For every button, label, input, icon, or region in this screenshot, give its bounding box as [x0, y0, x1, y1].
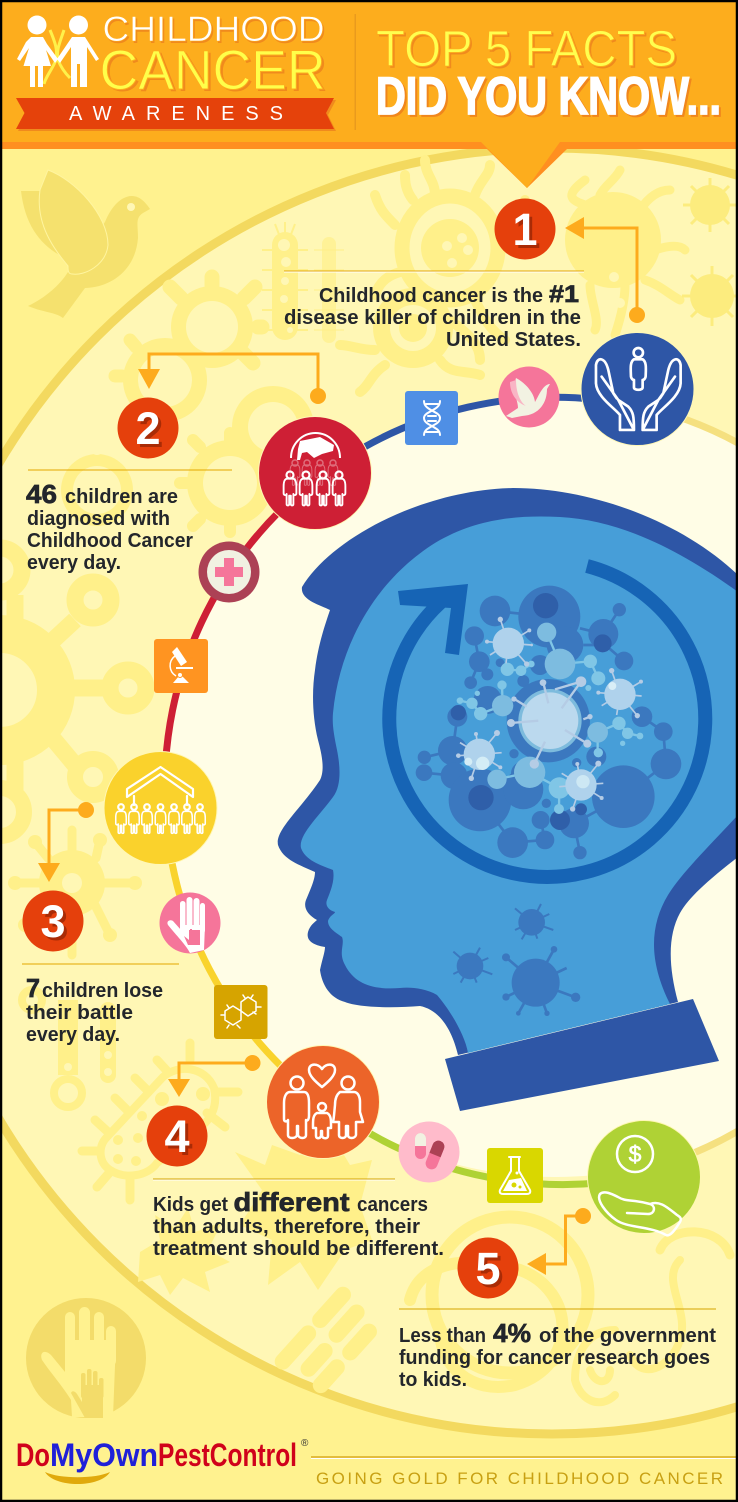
- icon: hand holding dollar: [588, 1120, 700, 1235]
- fact 1: text: disease killer of children in the: [284, 307, 581, 329]
- fact 3: number badge: 3: [40, 896, 66, 947]
- head silhouette: [278, 488, 738, 1111]
- decoration: right spiky cells: [682, 178, 738, 326]
- icon: world population: [258, 416, 372, 530]
- icon: pills badge: [398, 1122, 460, 1182]
- fact 1: [284, 198, 584, 351]
- decoration: top virus cells: [340, 160, 685, 392]
- head: cancer cells cluster: [416, 586, 681, 859]
- header: CANCER: CANCER: [100, 38, 326, 101]
- fact 4: text: [153, 1187, 444, 1260]
- fact 5: text: to kids.: [399, 1369, 467, 1391]
- fact 2: text: diagnosed with: [27, 508, 170, 530]
- icon: medical cross badge: [198, 542, 260, 602]
- fact 5: text: of the government: [539, 1325, 716, 1347]
- fact 3: number badge: 3: [43, 899, 69, 950]
- fact 2: text: [26, 479, 193, 574]
- fact 5: [399, 1238, 716, 1391]
- header: divider: [354, 14, 356, 130]
- fact 4: number badge: 4: [167, 1114, 193, 1165]
- fact 1: number badge: 1: [512, 204, 538, 255]
- footer: [16, 1437, 738, 1488]
- header: CANCER: CANCER: [102, 40, 328, 103]
- fact 4: number badge: [146, 1106, 208, 1166]
- fact 2: text: Childhood Cancer: [27, 530, 193, 552]
- fact 3: text: every day.: [26, 1024, 120, 1046]
- footer: logo: Do: [16, 1437, 50, 1473]
- header: awareness ribbon: [16, 98, 336, 131]
- fact 4: text: than adults, therefore, their: [153, 1216, 420, 1238]
- decoration: background hand circle: [26, 1298, 146, 1418]
- footer: logo: [16, 1437, 309, 1484]
- fact 5: text: funding for cancer research goes: [399, 1347, 710, 1369]
- fact 5: text: [399, 1318, 716, 1391]
- footer: rule: [311, 1456, 738, 1459]
- fact 4: rule: [153, 1178, 395, 1180]
- header: children and ribbon logo: [17, 16, 99, 87]
- header: CHILDHOOD: CHILDHOOD: [104, 12, 326, 51]
- header: CHILDHOOD: CHILDHOOD: [102, 10, 324, 49]
- header: orange bands and pointer: [0, 142, 738, 188]
- icon: flask tile: [487, 1148, 543, 1203]
- decoration: spiral and worms: [410, 1217, 730, 1402]
- fact 1: rule: [284, 270, 584, 272]
- fact 5: text: 4%: [493, 1318, 531, 1348]
- fact 1: number badge: [494, 198, 556, 260]
- icon: family with heart: [266, 1046, 380, 1158]
- icon: raised hand badge: [160, 892, 220, 954]
- timeline connector: 5: [527, 1208, 591, 1275]
- decoration: central-left virus: [8, 830, 142, 955]
- fact 2: text: 46: [26, 479, 57, 509]
- fact 3: [22, 890, 179, 1046]
- icon: hands protecting child: [581, 332, 694, 446]
- head: light blue fill: [301, 516, 738, 1053]
- fact 3: number badge: [22, 890, 84, 952]
- header: TOP 5 FACTS: TOP 5 FACTS: [378, 22, 679, 79]
- icon: molecule tile: [214, 985, 268, 1039]
- decoration: background dove: [21, 170, 150, 318]
- decoration: left cell network: [0, 548, 146, 836]
- fact 3: text: [26, 973, 163, 1046]
- fact 2: text: every day.: [27, 552, 121, 574]
- fact 2: rule: [28, 470, 232, 471]
- header: awareness ribbon: AWARENESS: [69, 103, 283, 125]
- icon: DNA tile: [405, 391, 458, 445]
- fact 1: number badge: 1: [515, 207, 541, 258]
- fact 2: number badge: [118, 398, 178, 458]
- timeline connector: 4: [168, 1055, 260, 1097]
- decoration: lower-left chain: [22, 990, 112, 1107]
- timeline connector: 1: [565, 217, 645, 323]
- footer: logo: ®: [301, 1438, 309, 1449]
- fact 3: text: children lose: [42, 980, 163, 1002]
- fact 5: text: Less than: [399, 1325, 486, 1347]
- fact 2: number badge: 2: [138, 406, 164, 457]
- fact 5: rule: [399, 1308, 716, 1310]
- icon: shelter over children: [104, 752, 217, 864]
- decoration: spiky suns: [138, 1140, 372, 1295]
- fact 2: number badge: 2: [135, 403, 161, 454]
- fact 5: number badge: 5: [478, 1246, 504, 1297]
- fact 4: text: cancers: [357, 1194, 428, 1216]
- decoration: rod virus: [82, 1043, 238, 1200]
- fact 4: [146, 1106, 444, 1260]
- footer: tagline: GOING GOLD FOR CHILDHOOD CANCER: [316, 1469, 723, 1488]
- icon: dove badge: [498, 366, 560, 428]
- timeline connector: 2: [138, 354, 326, 404]
- fact 4: number badge: 4: [164, 1111, 190, 1162]
- decoration: top gears: [61, 277, 314, 532]
- header: TOP 5 FACTS: TOP 5 FACTS: [376, 20, 677, 77]
- fact 4: text: different: [234, 1187, 350, 1217]
- timeline connector: 3: [38, 802, 94, 882]
- inner cream circle with coloured timeline: [165, 397, 738, 1185]
- icon: microscope tile: [154, 639, 208, 693]
- icon: hand holding dollar: $: [629, 1141, 642, 1167]
- fact 1: text: [284, 281, 581, 351]
- fact 1: text: United States.: [446, 329, 581, 351]
- fact 2: text: children are: [65, 486, 178, 508]
- fact 4: text: Kids get: [153, 1194, 228, 1216]
- footer: logo: MyOwn: [50, 1437, 158, 1473]
- head: circular arrow: [389, 566, 705, 877]
- fact 2: [26, 398, 232, 574]
- head: collar: [445, 999, 719, 1111]
- header banner: [0, 0, 738, 188]
- fact 1: text: #1: [549, 281, 579, 308]
- fact 1: text: Childhood cancer is the: [319, 285, 543, 307]
- head: small viruses on neck: [453, 904, 580, 1016]
- fact 5: number badge: [458, 1238, 518, 1298]
- footer: logo: PestControl: [158, 1437, 297, 1473]
- fact 3: text: 7: [26, 973, 40, 1003]
- fact 3: rule: [22, 964, 179, 965]
- fact 4: text: treatment should be different.: [153, 1238, 444, 1260]
- fact 5: number badge: 5: [475, 1243, 501, 1294]
- decoration: bacteria pills: [271, 1283, 387, 1402]
- head: dark outline: [278, 488, 738, 1055]
- fact 3: text: their battle: [26, 1002, 133, 1024]
- decoration: bacteria: [262, 222, 344, 343]
